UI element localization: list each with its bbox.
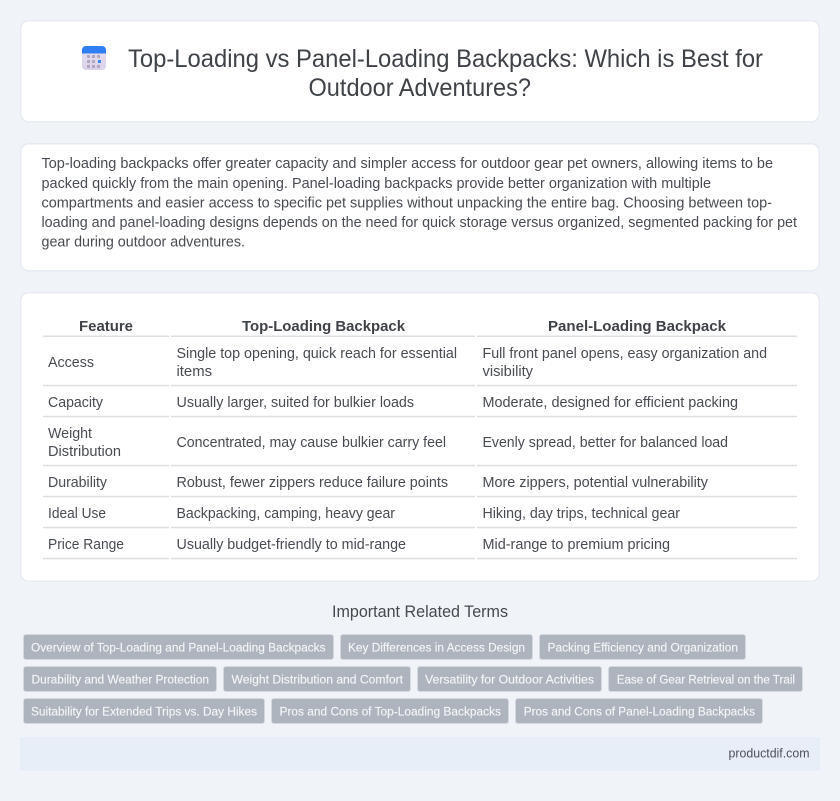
title xyxy=(128,45,763,102)
footer: productdif.com xyxy=(728,746,810,760)
panel: introduction text: gear during outdoor adventures. xyxy=(42,234,245,250)
related terms tags: Overview of Top-Loading and Panel-Loading Backpacks xyxy=(31,640,326,654)
panel: introduction text: Top-loading backpacks offer greater capacity and simpler access for outdoor gear pet owners, allowing items to be xyxy=(42,156,773,172)
related terms tags: Durability and Weather Protection xyxy=(32,672,209,686)
related terms tags: Weight Distribution and Comfort xyxy=(232,672,404,686)
related terms tags: Suitability for Extended Trips vs. Day Hikes xyxy=(31,704,257,718)
row: weight distribution xyxy=(48,426,728,460)
related terms tags: Versatility for Outdoor Activities xyxy=(425,672,594,686)
row: capacity: Moderate, designed for efficient packing xyxy=(482,395,738,411)
title: Outdoor Adventures? xyxy=(308,74,531,102)
related terms tags: Ease of Gear Retrieval on the Trail xyxy=(617,672,795,686)
related terms tags xyxy=(24,634,802,724)
row: access: items xyxy=(176,364,212,380)
row: price range: Price Range xyxy=(48,537,124,553)
row: access: Single top opening, quick reach for essential xyxy=(176,346,457,362)
row: capacity: Usually larger, suited for bulkier loads xyxy=(176,395,414,411)
row: ideal use xyxy=(48,506,680,522)
related terms tags: Pros and Cons of Top-Loading Backpacks xyxy=(280,704,501,718)
heading: important related terms: Important Related Terms xyxy=(332,603,508,621)
table header: Panel-Loading Backpack xyxy=(548,318,727,335)
row: weight distribution: Evenly spread, better for balanced load xyxy=(482,435,728,451)
row: price range: Mid-range to premium pricing xyxy=(482,537,670,553)
row: durability: More zippers, potential vulnerability xyxy=(482,475,709,491)
row: access: Full front panel opens, easy organization and xyxy=(482,346,767,362)
row: price range: Usually budget-friendly to mid-range xyxy=(176,537,406,553)
panel: introduction text: loading and panel-loading designs depends on the need for quick storage versus organized, segmented packing for pet xyxy=(42,215,797,231)
row: weight distribution: Distribution xyxy=(48,444,121,460)
row: durability xyxy=(48,475,709,491)
panel: introduction text xyxy=(21,144,819,271)
panel: header xyxy=(21,21,819,122)
table header xyxy=(79,318,727,335)
row: access xyxy=(48,346,767,380)
table header: Top-Loading Backpack xyxy=(242,318,406,335)
row: capacity: Capacity xyxy=(48,395,104,411)
row: capacity xyxy=(48,395,738,411)
panel: comparison table xyxy=(21,293,819,581)
footer xyxy=(20,737,820,771)
related terms tags: Packing Efficiency and Organization xyxy=(548,640,738,654)
table header: Feature xyxy=(79,318,133,335)
row: access: visibility xyxy=(482,364,534,380)
title: Top-Loading vs Panel-Loading Backpacks: Which is Best for xyxy=(128,45,763,73)
icon: calendar xyxy=(82,46,106,70)
row: ideal use: Hiking, day trips, technical gear xyxy=(482,506,680,522)
row: ideal use: Backpacking, camping, heavy gear xyxy=(176,506,395,522)
related terms tags: Key Differences in Access Design xyxy=(348,640,525,654)
related terms tags: Pros and Cons of Panel-Loading Backpacks xyxy=(524,704,755,718)
panel: introduction text: packed quickly from the main opening. Panel-loading backpacks provide better organization with multiple xyxy=(42,176,711,192)
row: weight distribution: Concentrated, may cause bulkier carry feel xyxy=(176,435,446,451)
row: price range xyxy=(48,537,670,553)
row: durability: Robust, fewer zippers reduce failure points xyxy=(176,475,448,491)
row: access: Access xyxy=(48,355,94,371)
row: durability: Durability xyxy=(48,475,108,491)
panel: introduction text: compartments and easier access to specific pet supplies without unpacking the entire bag. Choosing between top- xyxy=(42,196,772,212)
row: ideal use: Ideal Use xyxy=(48,506,106,522)
row: weight distribution: Weight xyxy=(48,426,92,442)
